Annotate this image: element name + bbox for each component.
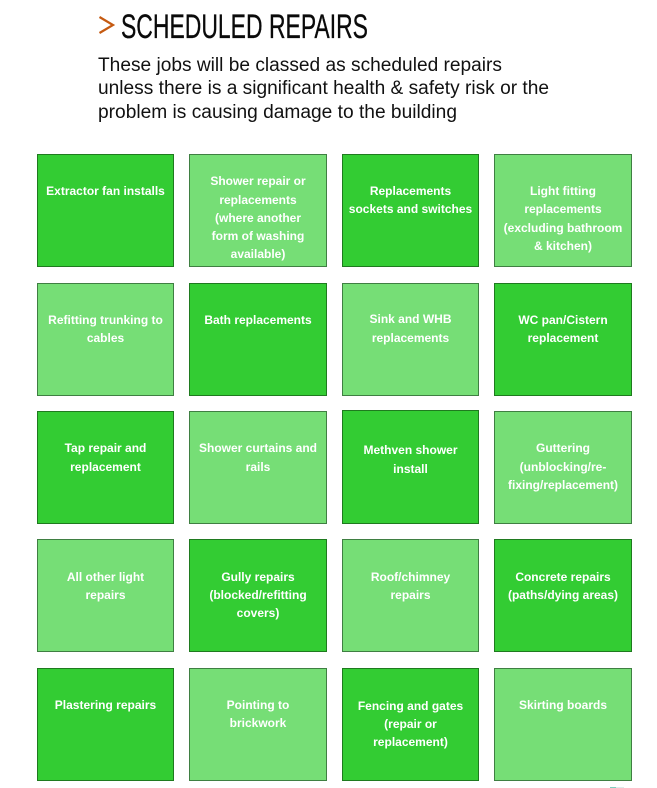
panel: Light fitting replacements [494,154,632,266]
panel: Guttering: (unblocking/re- [520,460,606,474]
panel: Gully repairs: Gully repairs [221,570,295,584]
panel: Concrete repairs: Concrete repairs [515,570,611,584]
panel: Tap repair [38,412,174,524]
intro text [98,55,549,123]
panel: Plastering repairs: Plastering repairs [55,698,157,712]
panel: Fencing and gates: Fencing and gates [358,699,463,713]
panel: Guttering: Guttering [536,441,590,455]
panel: Shower repair: available) [231,247,285,261]
panel: Refitting trunking: Refitting trunking to [48,313,163,327]
panel: Light fitting replacements: Light fitting [530,184,596,198]
panel: WC pan/Cistern: WC pan/Cistern [518,313,608,327]
panel: Light fitting replacements: & kitchen) [534,239,592,253]
intro text: These jobs will be classed as scheduled repairs [98,55,502,76]
panel: Fencing and gates [342,668,478,780]
panel: All other light repairs: repairs [85,588,126,602]
panel: Pointing to brickwork: Pointing to [227,698,289,712]
panel: Methven shower: Methven shower [363,443,458,457]
panel: Gully repairs [190,540,326,652]
panel: Shower repair [190,154,326,266]
panel: Roof/chimney: repairs [390,588,431,602]
panel: WC pan/Cistern [494,284,632,396]
panel: Methven shower [342,410,478,524]
panel: Concrete repairs: (paths/dying areas) [508,588,618,602]
panel: Light fitting replacements: (excluding bathroom [504,221,622,235]
panel: Gully repairs: covers) [237,606,279,620]
panel: Tap repair: Tap repair and [65,441,146,455]
panel: Refitting trunking [38,284,174,396]
panel: Replacements sockets and switches: Replacements [370,184,452,198]
panel: Pointing to brickwork: brickwork [230,716,287,730]
panel: Methven shower: install [393,462,428,476]
panel: Extractor fan installs: Extractor fan installs [46,184,165,198]
panel: Refitting trunking: cables [87,331,125,345]
intro text: unless there is a significant health & safety risk or the [98,78,549,99]
panel: Replacements sockets and switches: sockets and switches [349,202,473,216]
panel: Shower repair: (where another [215,211,301,225]
panel: Roof/chimney: Roof/chimney [371,570,450,584]
panel: Concrete repairs [494,540,632,652]
panel: Light fitting replacements: replacements [524,202,602,216]
panel: Shower repair: replacements [219,193,297,207]
title: SCHEDULED REPAIRS [121,8,368,46]
panel: Pointing to brickwork [190,668,326,780]
panel: WC pan/Cistern: replacement [528,331,598,345]
panel: Shower curtains: rails [246,460,271,474]
panel: Extractor fan installs [38,154,174,266]
panel: All other light repairs [38,540,174,652]
intro text: problem is causing damage to the building [98,102,457,123]
panel: All other light repairs: All other light [67,570,144,584]
panel: Bath replacements: Bath replacements [204,313,312,327]
panel: Plastering repairs [38,668,174,780]
panel: Fencing and gates: (repair or [384,717,437,731]
panel: Shower repair: form of washing [212,229,304,243]
panel: Guttering: fixing/replacement) [508,478,618,492]
panel: Fencing and gates: replacement) [373,735,448,749]
panel: Bath replacements [190,284,326,396]
panel: Sink and WHB [342,284,478,396]
panel: Skirting boards [494,668,632,780]
title [100,8,368,46]
panel: Skirting boards: Skirting boards [519,698,607,712]
panel: Roof/chimney [342,540,478,652]
panel: Shower curtains [190,412,326,524]
panel: Shower curtains: Shower curtains and [199,441,317,455]
panel: Guttering [494,412,632,524]
panel: Sink and WHB: Sink and WHB [369,312,452,326]
panel: Sink and WHB: replacements [372,331,450,345]
panel: Gully repairs: (blocked/refitting [209,588,307,602]
panel: Replacements sockets and switches [342,154,478,266]
panel: Shower repair: Shower repair or [210,174,306,188]
panel: Tap repair: replacement [70,460,141,474]
